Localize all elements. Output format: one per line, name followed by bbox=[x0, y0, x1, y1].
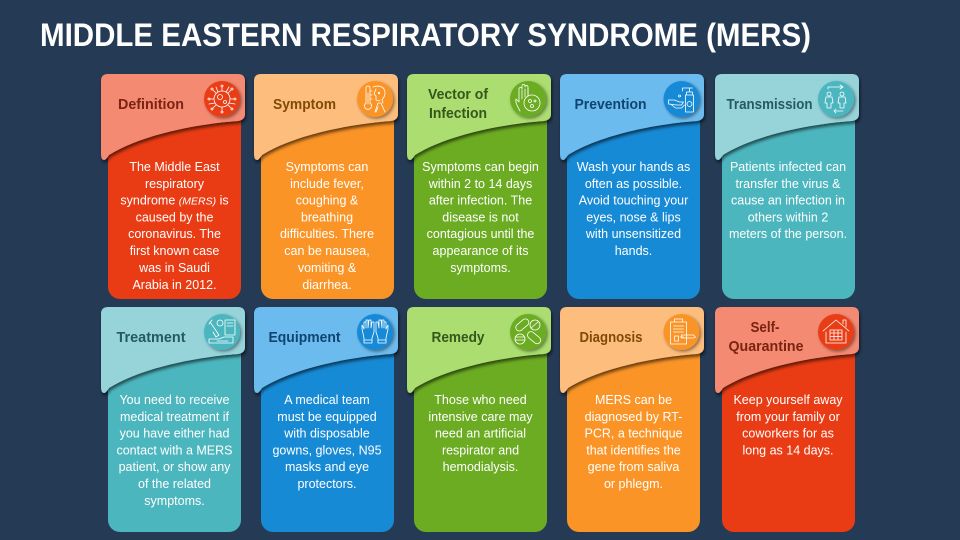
body text: Symptoms can begin bbox=[422, 160, 539, 174]
panel: Symptom bbox=[254, 74, 398, 299]
heading: Self- bbox=[750, 320, 780, 336]
body text: Symptoms can bbox=[286, 160, 368, 174]
panel: Prevention bbox=[560, 74, 704, 299]
body text: respirator and bbox=[442, 444, 519, 458]
card header bbox=[407, 307, 551, 393]
body text: long as 14 days. bbox=[742, 444, 834, 458]
body text: hemodialysis. bbox=[443, 460, 518, 474]
body text: masks and eye bbox=[285, 460, 369, 474]
heading: Prevention bbox=[574, 97, 647, 113]
body text: need an artificial bbox=[435, 426, 526, 440]
card header bbox=[560, 307, 704, 393]
body text: or phlegm. bbox=[604, 477, 663, 491]
body text: coughing & bbox=[296, 194, 359, 208]
body text: within 2 to 14 days bbox=[428, 177, 532, 191]
body text: medical treatment if bbox=[120, 410, 230, 424]
body text: eyes, nose & lips bbox=[586, 210, 681, 224]
panel: Diagnosis bbox=[560, 307, 704, 532]
body text: protectors. bbox=[297, 477, 357, 491]
body text: hands. bbox=[615, 244, 652, 258]
body text: syndrome (MERS) is bbox=[120, 194, 229, 208]
card body bbox=[414, 337, 547, 532]
icon: house with calendar bbox=[818, 314, 854, 350]
body text: PCR, a technique bbox=[585, 426, 683, 440]
body text: difficulties. There bbox=[280, 227, 374, 241]
icon: two people exchanging bbox=[818, 81, 854, 117]
panel: Treatment bbox=[101, 307, 245, 532]
heading line 2: Quarantine bbox=[728, 339, 804, 355]
card header bbox=[407, 74, 551, 160]
body text: appearance of its bbox=[433, 244, 528, 258]
body text: disease is not bbox=[442, 210, 519, 224]
body text: gene from saliva bbox=[588, 460, 679, 474]
icon: hand sanitizer bbox=[664, 81, 700, 117]
heading: Definition bbox=[118, 97, 184, 113]
icon: virus bbox=[204, 81, 240, 117]
body text: breathing bbox=[301, 210, 353, 224]
body text: coworkers for as bbox=[742, 426, 834, 440]
body text: must be equipped bbox=[277, 410, 377, 424]
body text: contagious until the bbox=[427, 227, 534, 241]
heading: Treatment bbox=[116, 330, 186, 346]
body text: Avoid touching your bbox=[579, 194, 688, 208]
card header bbox=[101, 307, 245, 393]
panel: Equipment bbox=[254, 307, 398, 532]
body text: from your family or bbox=[736, 410, 840, 424]
title: MIDDLE EASTERN RESPIRATORY SYNDROME (MERS) bbox=[40, 17, 811, 53]
body text: symptoms. bbox=[450, 261, 511, 275]
body text: A medical team bbox=[284, 393, 370, 407]
icon: hand with germs bbox=[510, 81, 546, 117]
card header bbox=[715, 307, 859, 393]
heading: Diagnosis bbox=[580, 330, 642, 346]
card body bbox=[722, 104, 855, 299]
body text: respiratory bbox=[145, 177, 205, 191]
card header bbox=[560, 74, 704, 160]
body text: intensive care may bbox=[428, 410, 533, 424]
body text: Wash your hands as bbox=[577, 160, 690, 174]
body text: diarrhea. bbox=[302, 278, 352, 292]
card body bbox=[108, 104, 241, 299]
card header bbox=[254, 74, 398, 160]
heading: Equipment bbox=[268, 330, 341, 346]
body text: gowns, gloves, N95 bbox=[272, 444, 382, 458]
icon: clipboard and pen bbox=[664, 314, 700, 350]
body text: meters of the person. bbox=[729, 227, 847, 241]
card body bbox=[722, 337, 855, 532]
card body bbox=[567, 337, 700, 532]
panel: Definition bbox=[101, 74, 245, 299]
body text: coronavirus. The bbox=[128, 227, 221, 241]
body text: patient, or show any bbox=[119, 460, 231, 474]
panel: Transmission bbox=[715, 74, 859, 299]
heading: Remedy bbox=[432, 330, 485, 346]
heading: Transmission bbox=[726, 97, 813, 113]
body text: that identifies the bbox=[586, 444, 681, 458]
panel: Self-Quarantine bbox=[715, 307, 859, 532]
card body bbox=[261, 337, 394, 532]
body text: first known case bbox=[130, 244, 219, 258]
card header bbox=[715, 74, 859, 160]
body text: symptoms. bbox=[144, 494, 205, 508]
body text: transfer the virus & bbox=[736, 177, 841, 191]
heading line 2: Infection bbox=[429, 106, 487, 122]
body text: Keep yourself away bbox=[733, 393, 843, 407]
body text: can be nausea, bbox=[284, 244, 370, 258]
body text: include fever, bbox=[290, 177, 364, 191]
body text: others within 2 bbox=[748, 210, 828, 224]
body text: with unsensitized bbox=[585, 227, 681, 241]
body text: MERS can be bbox=[595, 393, 672, 407]
body text: cause an infection in bbox=[731, 194, 845, 208]
body text: often as possible. bbox=[585, 177, 682, 191]
body text: was in Saudi bbox=[138, 261, 210, 275]
body text: diagnosed by RT- bbox=[585, 410, 682, 424]
icon: thermometer and sick person bbox=[357, 81, 393, 117]
body text: caused by the bbox=[136, 210, 213, 224]
panel: Vector of Infection bbox=[407, 74, 551, 299]
body text: The Middle East bbox=[129, 160, 220, 174]
card body bbox=[567, 104, 700, 299]
body text: vomiting & bbox=[298, 261, 357, 275]
card body bbox=[414, 104, 547, 299]
card body bbox=[108, 337, 241, 532]
icon: gloves bbox=[357, 314, 393, 350]
body text: after infection. The bbox=[429, 194, 532, 208]
body text: you have either had bbox=[120, 426, 229, 440]
heading: Symptom bbox=[273, 97, 336, 113]
heading: Vector of bbox=[428, 87, 488, 103]
body text: Patients infected can bbox=[730, 160, 846, 174]
body text: of the related bbox=[138, 477, 211, 491]
body text: with disposable bbox=[283, 426, 370, 440]
panel: Remedy bbox=[407, 307, 551, 532]
icon: medical treatment bbox=[204, 314, 240, 350]
body text: You need to receive bbox=[119, 393, 230, 407]
card header bbox=[254, 307, 398, 393]
body text: contact with a MERS bbox=[116, 444, 233, 458]
card body bbox=[261, 104, 394, 299]
icon: pills bbox=[510, 314, 546, 350]
body text: Arabia in 2012. bbox=[132, 278, 217, 292]
card header bbox=[101, 74, 245, 160]
body text: Those who need bbox=[434, 393, 527, 407]
